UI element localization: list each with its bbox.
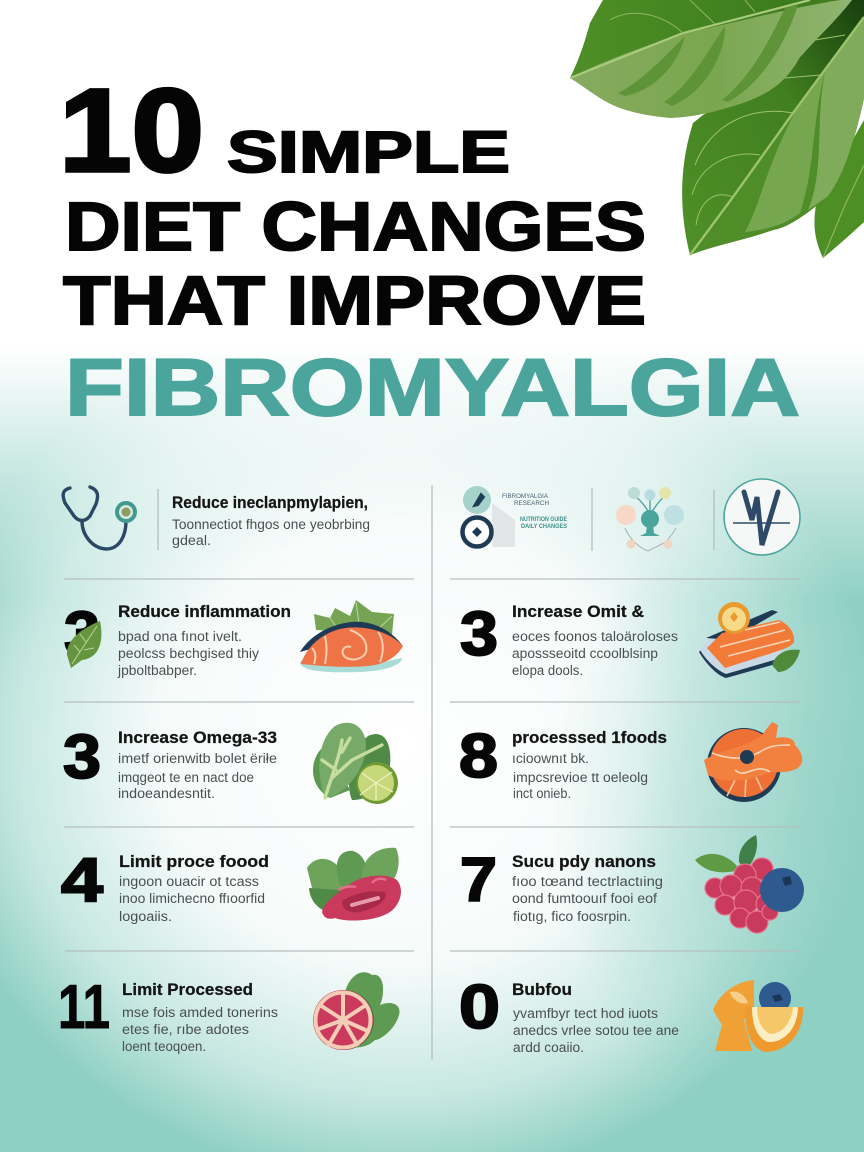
text: Limit proce foood	[119, 853, 269, 871]
text: fiotıg, fico foosrpin.	[513, 909, 631, 924]
title: THAT IMPROVE	[63, 262, 646, 339]
icon: document badges: RESEARCH	[514, 500, 549, 507]
title: SIMPLE	[227, 120, 510, 185]
text: impcsrevioe tt oeleolg	[513, 770, 648, 785]
title: DIET CHANGES	[65, 188, 646, 265]
icon: citrus and salmon bowl	[704, 722, 802, 802]
text: bpad ona fınot ivelt.	[118, 629, 242, 644]
title	[59, 65, 800, 433]
text: intro: Reduce ineclanpmylapien,	[172, 494, 368, 512]
row: left 4	[61, 846, 401, 924]
text	[119, 853, 269, 924]
icon: document badges: FIBROMYALGIA	[502, 493, 549, 500]
icon: herb over number	[67, 621, 101, 668]
number: 3	[64, 600, 100, 669]
decorative leaves	[570, 0, 864, 258]
row: left 5	[58, 972, 400, 1054]
icon: berries and blueberry	[695, 835, 804, 933]
text: jpboltbabper.	[117, 663, 197, 678]
row: left 2	[64, 600, 403, 678]
column and row dividers	[64, 485, 800, 1060]
row: right 3	[459, 722, 802, 802]
text: Increase Omega-33	[118, 729, 277, 747]
text: loent teoqoen.	[122, 1039, 206, 1054]
row: right 4	[460, 835, 804, 933]
icon: greens and red beans	[307, 848, 401, 920]
number: 4	[61, 846, 104, 915]
text	[117, 603, 291, 678]
number: 3	[63, 723, 101, 792]
title: FIBROMYALGIA	[65, 343, 800, 433]
text: processsed 1foods	[512, 729, 667, 747]
text: yvamfbyr tect hod iuots	[513, 1006, 658, 1021]
text: Increase Omit &	[512, 603, 644, 621]
icon: wellness tree	[616, 487, 684, 551]
text: intro	[172, 494, 370, 548]
icon: pomegranate with leaves	[313, 972, 400, 1050]
icon: orange slices and blueberry	[713, 980, 803, 1052]
text: peolcss bechgised thiy	[118, 646, 259, 661]
text: apossseoitd ccoolblsinp	[512, 646, 658, 661]
text: Reduce inflammation	[118, 603, 291, 621]
text	[512, 603, 678, 678]
text: anedcs vrlee sotou tee ane	[513, 1023, 679, 1038]
text: imetf orienwitb bolet ëriłe	[118, 751, 277, 766]
text: ıcioownıt bk.	[512, 751, 589, 766]
number: 8	[459, 722, 498, 791]
text: oond fumtoouıf fooi eof	[512, 891, 657, 906]
text: elopa dools.	[512, 663, 583, 678]
text: fıoo tœand tectrlactıing	[512, 874, 663, 889]
icon: salmon with greens	[300, 600, 403, 672]
text: Bubfou	[512, 981, 572, 999]
text: Limit Processed	[122, 981, 253, 999]
text: inoo limichecno ffıoorfid	[119, 891, 265, 906]
text: indoeandesntit.	[118, 786, 215, 801]
number: 3	[460, 600, 498, 669]
text: imqgeot te en nact doe	[118, 770, 254, 785]
icon: stethoscope	[63, 487, 135, 549]
text: Sucu pdy nanons	[512, 853, 656, 871]
row: right 2	[460, 600, 800, 678]
icon: document badges: DAILY CHANGES	[521, 523, 568, 530]
text: intro: Toonnectiot fhgos one yeobrbing	[172, 517, 370, 532]
text: eoces foonos taloäroloses	[512, 629, 678, 644]
icon: document badges: NUTRITION GUIDE	[520, 516, 568, 523]
text: ingoon ouacir ot tcass	[119, 874, 259, 889]
text: logoaiis.	[119, 909, 172, 924]
text	[512, 853, 663, 924]
number: 11	[58, 973, 110, 1042]
text: intro: gdeal.	[172, 533, 211, 548]
icon: pulse badge	[724, 479, 800, 555]
icon: greens and lime	[313, 723, 398, 804]
row: left 3	[63, 723, 398, 804]
text	[122, 981, 278, 1054]
text: inct onieb.	[513, 786, 571, 801]
icon: document badges	[462, 486, 568, 547]
panel: top right icons	[462, 479, 800, 555]
row: right 5	[459, 973, 803, 1055]
text	[118, 729, 277, 801]
text: ardd coaiio.	[513, 1040, 584, 1055]
text: etes fie, rıbe adotes	[122, 1022, 249, 1037]
text	[512, 729, 667, 801]
number: 0	[459, 973, 500, 1042]
title: 10	[59, 65, 204, 197]
text: mse fois amded tonerins	[122, 1005, 278, 1020]
text	[512, 981, 679, 1055]
panel: top left intro	[63, 487, 370, 550]
number: 7	[460, 846, 497, 915]
icon: salmon fillet with lemon	[699, 602, 800, 678]
